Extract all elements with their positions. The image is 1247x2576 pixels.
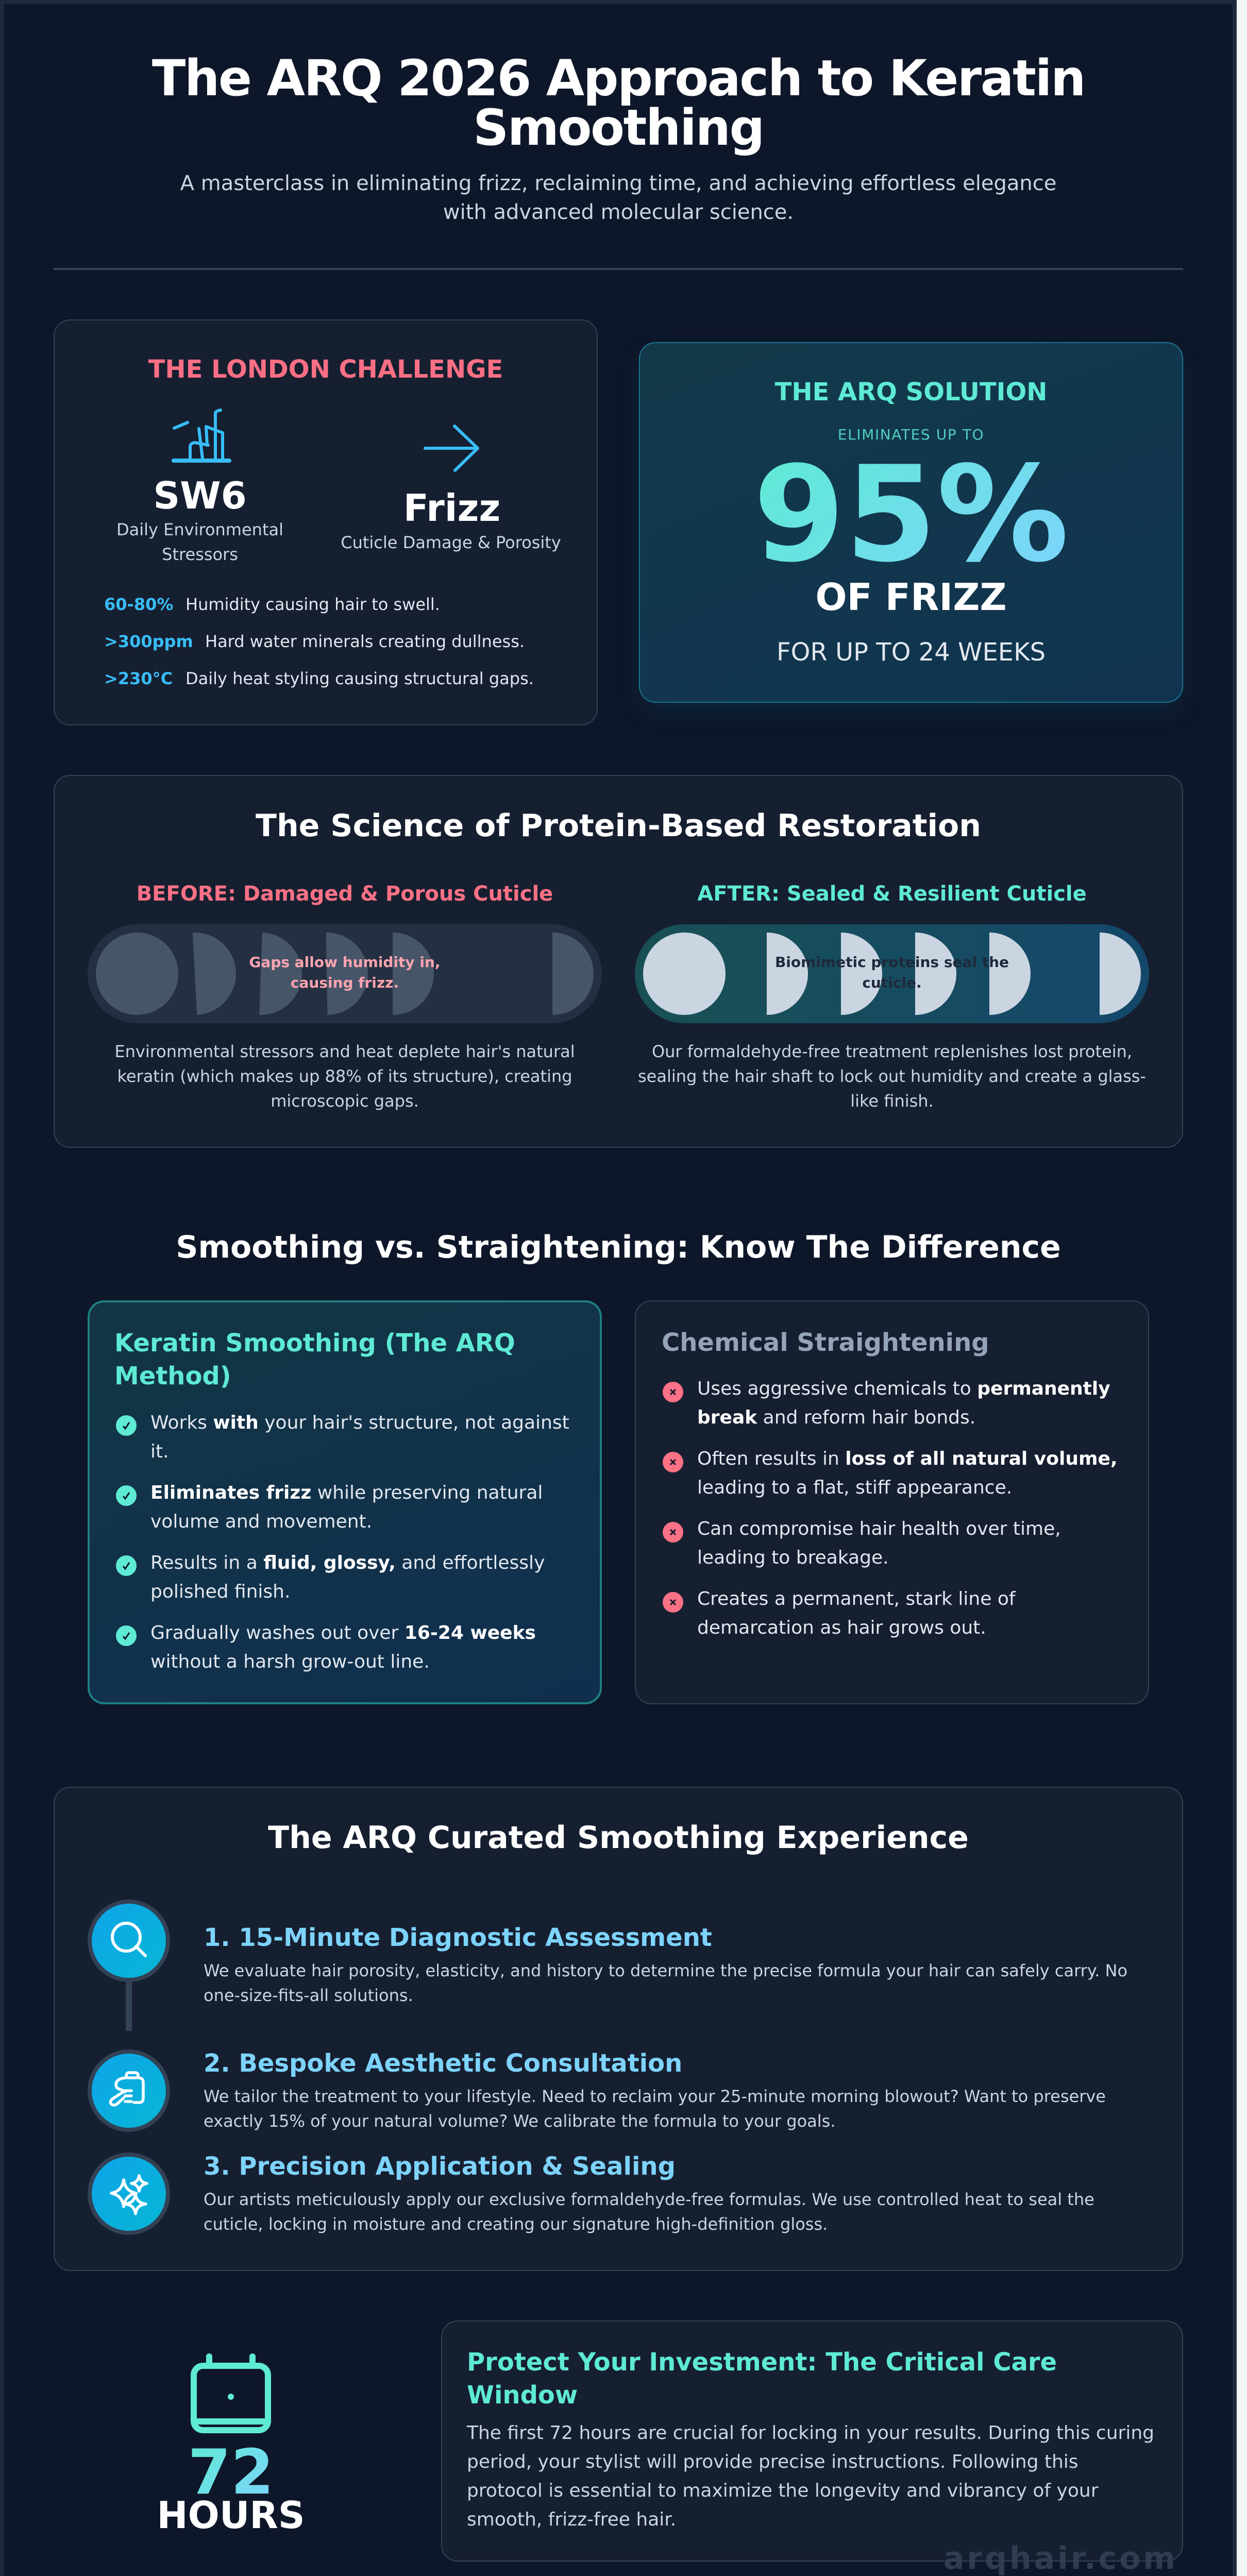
list item: gradual wash out: without a harsh grow-out line.	[150, 1651, 430, 1672]
text: care description: protocol is essential to maximize the longevity and vibrancy of your	[467, 2480, 1099, 2501]
text: before description: microscopic gaps.	[271, 1091, 419, 1111]
list item: aggressive chemicals	[663, 1378, 1110, 1428]
icon: city buildings	[172, 409, 231, 463]
step 1 description	[204, 1958, 1127, 2008]
heading: the London challenge: THE LONDON CHALLENGE	[148, 355, 503, 384]
diagram: damaged cuticle capsule	[88, 924, 602, 1023]
list item: gradual wash out	[116, 1622, 536, 1672]
text: care description	[467, 2419, 1154, 2534]
heading: critical care window: Protect Your Investment: The Critical Care	[467, 2348, 1057, 2377]
text: after description: like finish.	[850, 1091, 934, 1111]
list item: loss of volume	[663, 1448, 1118, 1498]
diagram: sealed cuticle capsule	[635, 924, 1149, 1023]
subtitle: A masterclass in eliminating frizz, reclaiming time, and achieving effortless elegance	[180, 172, 1056, 195]
watermark: arqhair.com: arqhair.com	[943, 2540, 1178, 2576]
callout: gaps allow humidity: causing frizz.	[291, 974, 399, 991]
list item: eliminates frizz: Eliminates frizz while preserving natural	[150, 1482, 543, 1503]
callout: biomimetic proteins: cuticle.	[862, 974, 922, 991]
heading: smoothing vs straightening: Smoothing vs. Straightening: Know The Difference	[176, 1229, 1061, 1265]
panel: chemical straightening	[635, 1300, 1149, 1704]
caption: daily environmental stressors: Stressors	[162, 545, 238, 564]
text: care description: period, your stylist will provide precise instructions. Following this	[467, 2451, 1079, 2472]
step 2 text	[204, 2047, 1162, 2133]
list item: line of demarcation: Creates a permanent, stark line of	[697, 1588, 1016, 1609]
caption: cuticle damage: Cuticle Damage & Porosity	[341, 533, 561, 552]
list item: compromises health	[663, 1518, 1061, 1568]
text: before description: keratin (which makes up 88% of its structure), creating	[117, 1066, 572, 1086]
label: of frizz: OF FRIZZ	[815, 575, 1007, 619]
big number: 95%: 95%	[753, 438, 1069, 591]
title: The ARQ 2026 Approach to Keratin	[152, 49, 1085, 107]
list item: works with hair: it.	[150, 1441, 169, 1462]
list item: works with hair: Works with your hair's structure, not against	[150, 1412, 569, 1433]
icon: magnifying glass	[88, 1900, 170, 1982]
panel: curated smoothing experience	[54, 1787, 1183, 2271]
callout: biomimetic proteins	[775, 954, 1009, 991]
step 1 description: We evaluate hair porosity, elasticity, and history to determine the precise formula your hair can safely carry. No	[204, 1961, 1127, 1980]
icon: calendar	[186, 2349, 276, 2437]
panel: science of protein-based restoration	[54, 775, 1183, 1148]
list item: line of demarcation	[663, 1585, 1126, 1642]
step 3 description: cuticle, locking in moisture and creating our signature high-definition gloss.	[204, 2214, 828, 2234]
list item: line of demarcation: demarcation as hair grows out.	[697, 1617, 986, 1638]
stat line: humidity: 60-80%	[104, 595, 173, 614]
stat line: humidity: Humidity causing hair to swell.	[186, 595, 440, 614]
heading: chemical straightening: Chemical Straightening	[662, 1328, 989, 1357]
step 3 text	[204, 2150, 1162, 2236]
stat line: hard water: Hard water minerals creating dullness.	[205, 632, 525, 651]
heading: keratin smoothing	[114, 1329, 515, 1391]
stat line: heat styling: >230°C	[104, 669, 173, 688]
subtitle	[180, 172, 1056, 224]
heading: science: The Science of Protein-Based Restoration	[256, 808, 981, 844]
label: after: AFTER: Sealed & Resilient Cuticle	[697, 882, 1087, 906]
step 2 heading: 2. Bespoke Aesthetic Consultation	[204, 2049, 682, 2078]
callout: gaps allow humidity: Gaps allow humidity in,	[249, 954, 441, 971]
list item: eliminates frizz	[116, 1482, 543, 1532]
heading: critical care window: Window	[467, 2381, 578, 2410]
text: care description: smooth, frizz-free hair.	[467, 2509, 676, 2530]
step 3 heading: 3. Precision Application & Sealing	[204, 2152, 676, 2181]
label: before: BEFORE: Damaged & Porous Cuticle	[137, 882, 553, 906]
big number: 72: 72	[188, 2437, 274, 2509]
stat line: hard water: >300ppm	[104, 632, 193, 651]
text: before description: Environmental stressors and heat deplete hair's natural	[114, 1042, 575, 1061]
step 2 description	[204, 2084, 1106, 2133]
text: before description	[114, 1042, 575, 1111]
heading: the ARQ solution: THE ARQ SOLUTION	[775, 378, 1047, 406]
arrow: leads to frizz	[424, 425, 479, 472]
caption: daily environmental stressors: Daily Environmental	[116, 520, 283, 539]
step 3 description: Our artists meticulously apply our exclusive formaldehyde-free formulas. We use controlled heat to seal the	[204, 2190, 1094, 2209]
step 1 text	[204, 1921, 1162, 2008]
list item: fluid glossy finish	[116, 1552, 545, 1602]
label: for up to 24 weeks: FOR UP TO 24 WEEKS	[777, 638, 1046, 667]
callout: biomimetic proteins: Biomimetic proteins seal the	[775, 954, 1009, 971]
list item: aggressive chemicals: break and reform hair bonds.	[697, 1407, 975, 1428]
subtitle: with advanced molecular science.	[443, 200, 794, 224]
text: after description: Our formaldehyde-free treatment replenishes lost protein,	[652, 1042, 1132, 1061]
panel: the London challenge	[54, 319, 598, 725]
list item: loss of volume: Often results in loss of all natural volume,	[697, 1448, 1118, 1469]
step 2 description: exactly 15% of your natural volume? We calibrate the formula to your goals.	[204, 2111, 836, 2131]
stat: frizz: Frizz	[403, 486, 500, 530]
step 1 heading: 1. 15-Minute Diagnostic Assessment	[204, 1923, 712, 1952]
panel: the ARQ solution	[639, 342, 1183, 703]
step 1 description: one-size-fits-all solutions.	[204, 1986, 413, 2005]
label: hours: HOURS	[157, 2494, 305, 2537]
list item: loss of volume: leading to a flat, stiff appearance.	[697, 1477, 1012, 1498]
list item: fluid glossy finish: polished finish.	[150, 1581, 290, 1602]
heading: curated experience: The ARQ Curated Smoothing Experience	[268, 1820, 969, 1856]
icon: clipboard	[88, 2049, 170, 2132]
step 2 description: We tailor the treatment to your lifestyle. Need to reclaim your 25-minute morning blowout? Want to preserve	[204, 2087, 1106, 2106]
header: title and subtitle	[54, 49, 1183, 270]
caption: daily environmental stressors	[116, 520, 283, 564]
list item: works with hair	[116, 1412, 569, 1462]
stat line: heat styling: Daily heat styling causing structural gaps.	[186, 669, 534, 688]
callout: 72 hours	[155, 2349, 307, 2535]
panel: protect your investment	[441, 2320, 1183, 2562]
list item: gradual wash out: Gradually washes out over 16-24 weeks	[150, 1622, 536, 1643]
title	[152, 49, 1085, 157]
text: care description: The first 72 hours are crucial for locking in your results. During this curing	[467, 2422, 1154, 2444]
icon: sparkles	[88, 2153, 170, 2235]
panel: keratin smoothing	[88, 1300, 602, 1704]
text: after description	[638, 1042, 1146, 1111]
label: eliminates up to: ELIMINATES UP TO	[838, 426, 984, 443]
heading: keratin smoothing: Keratin Smoothing (The ARQ	[114, 1329, 515, 1358]
heading: keratin smoothing: Method)	[114, 1362, 231, 1391]
list item: compromises health: Can compromise hair health over time,	[697, 1518, 1061, 1539]
title: Smoothing	[473, 99, 764, 157]
list item: eliminates frizz: volume and movement.	[150, 1511, 372, 1532]
text: after description: sealing the hair shaft to lock out humidity and create a glass-	[638, 1066, 1146, 1086]
heading: critical care window	[467, 2346, 1057, 2412]
stat: SW6: SW6	[153, 474, 247, 517]
list item: fluid glossy finish: Results in a fluid, glossy, and effortlessly	[150, 1552, 545, 1573]
step 3 description	[204, 2187, 1094, 2236]
callout: gaps allow humidity	[249, 954, 441, 991]
list item: aggressive chemicals: Uses aggressive chemicals to permanently	[697, 1378, 1110, 1399]
list item: compromises health: leading to breakage.	[697, 1547, 889, 1568]
